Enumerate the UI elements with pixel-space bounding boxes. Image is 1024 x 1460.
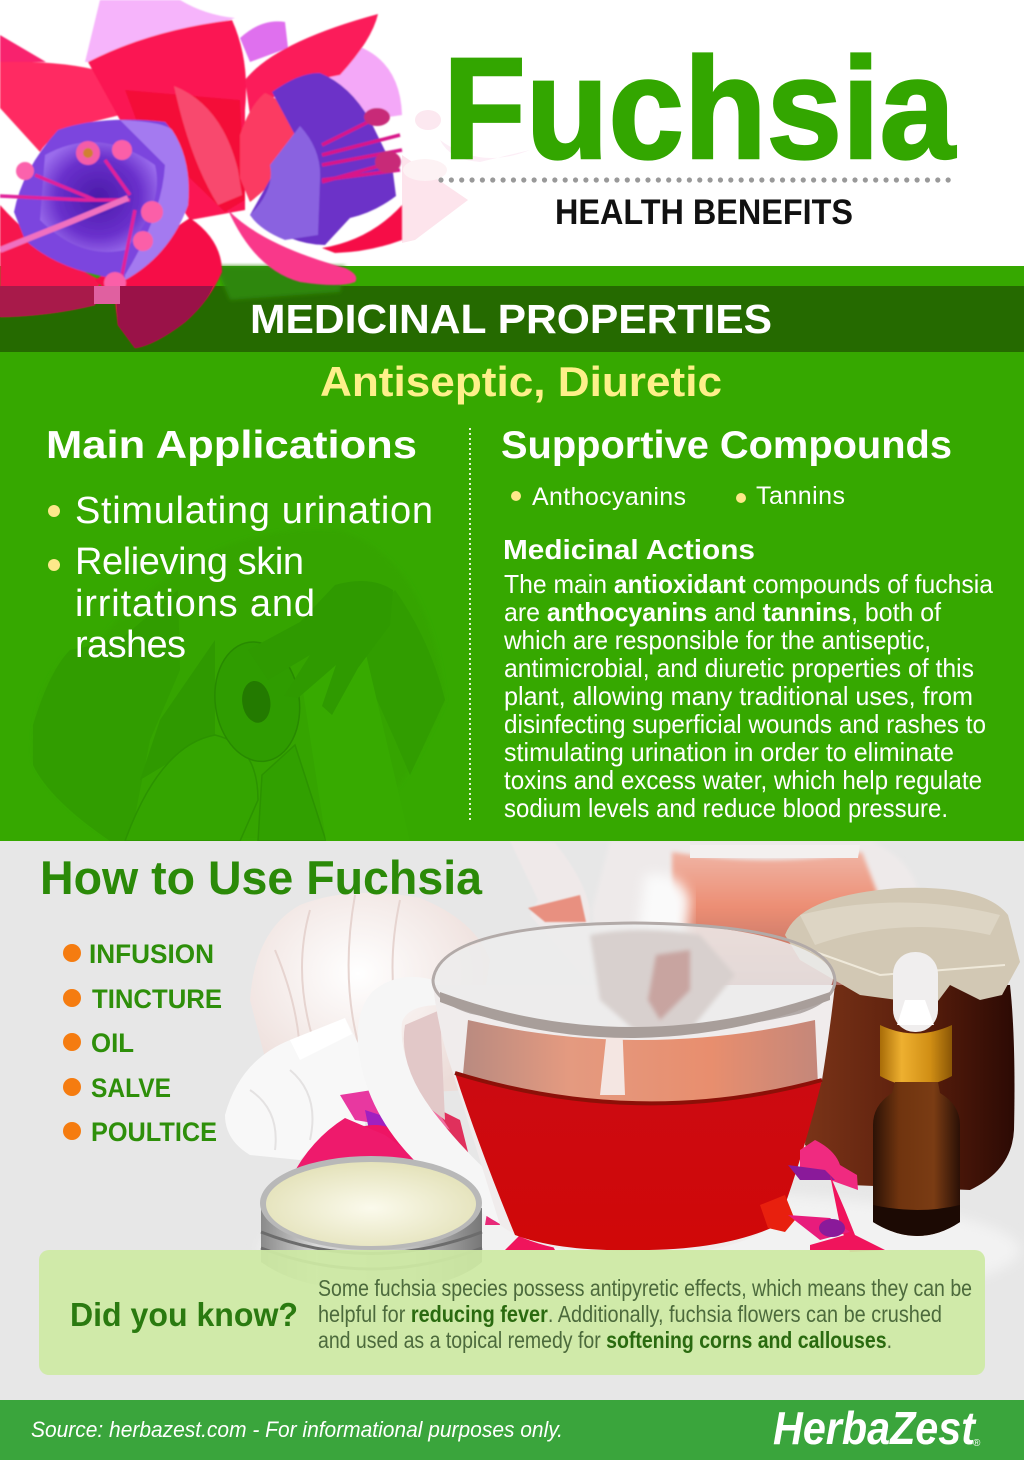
photo: woman holding toilet paper (green tint) xyxy=(33,581,445,841)
photo: poultice xyxy=(225,893,490,1160)
title: Fuchsia: Fuchsia xyxy=(443,28,956,189)
panel: main applications xyxy=(46,424,433,666)
callout text: and used as a topical remedy for softening corns and callouses. xyxy=(318,1327,892,1353)
application bullet: stimulating urination: Stimulating urination xyxy=(75,490,433,532)
use: salve: SALVE xyxy=(91,1073,171,1103)
text: medicinal actions description: toxins and excess water, which help regulate xyxy=(504,765,982,795)
text: medicinal actions description: disinfecting superficial wounds and rashes to xyxy=(504,709,986,739)
use: tincture: TINCTURE xyxy=(92,984,222,1014)
medicinal properties band xyxy=(0,286,1024,352)
text: medicinal actions description: antimicrobial, and diuretic properties of this xyxy=(504,653,974,683)
photo: fuchsia blossoms left xyxy=(290,1070,555,1250)
dotted column divider xyxy=(469,428,471,822)
properties: antiseptic, diuretic: Antiseptic, Diuretic xyxy=(320,358,722,405)
logo: HerbaZest: HerbaZest xyxy=(773,1402,977,1454)
application bullet: relieving skin: rashes xyxy=(75,624,186,666)
fuchsia flower illustration xyxy=(0,0,402,348)
text: medicinal actions description: plant, allowing many traditional uses, from xyxy=(504,681,973,711)
source text: Source: herbazest.com - For informational purposes only. xyxy=(31,1417,563,1442)
text: medicinal actions description: which are responsible for the antiseptic, xyxy=(503,625,931,655)
logo: HerbaZest: ® xyxy=(973,1438,981,1449)
subtitle: HEALTH BENEFITS xyxy=(555,193,853,232)
footer xyxy=(0,1400,1024,1460)
text: medicinal actions description: stimulating urination in order to eliminate xyxy=(504,737,954,767)
right purple bloom xyxy=(250,73,396,245)
photo: table highlight xyxy=(482,1199,1014,1270)
left bloom stamens xyxy=(0,160,135,285)
dotted divider xyxy=(441,177,950,183)
photo: salve tin xyxy=(260,1156,482,1290)
text: medicinal actions description: The main antioxidant compounds of fuchsia xyxy=(504,569,994,599)
right bloom stamens xyxy=(322,120,402,182)
heading: medicinal actions: Medicinal Actions xyxy=(503,534,755,565)
use: poultice: POULTICE xyxy=(91,1117,217,1147)
panel: supportive compounds xyxy=(501,424,994,823)
heading: how to use fuchsia: How to Use Fuchsia xyxy=(40,851,483,904)
callout heading: Did you know? xyxy=(70,1296,298,1333)
heading: supportive compounds: Supportive Compounds xyxy=(501,424,952,467)
photo: tea cup xyxy=(358,923,835,1256)
photo: jar with paper lid xyxy=(785,888,1020,1190)
background petals xyxy=(85,0,235,62)
callout: did you know xyxy=(39,1250,985,1375)
text: medicinal actions description: are anthocyanins and tannins, both of xyxy=(504,597,942,627)
heading: main applications: Main Applications xyxy=(46,424,417,467)
left purple bloom xyxy=(14,120,188,280)
list: ways to use xyxy=(63,939,222,1147)
flower shadow on green xyxy=(215,266,345,300)
photo: teapot xyxy=(528,845,879,985)
use: infusion: INFUSION xyxy=(89,939,214,969)
use: salve xyxy=(63,1073,171,1103)
use: oil xyxy=(63,1028,134,1058)
application bullet: relieving skin: irritations and xyxy=(75,583,315,625)
heading: medicinal properties: MEDICINAL PROPERTIES xyxy=(250,296,772,342)
callout text: helpful for reducing fever. Additionally, fuchsia flowers can be crushed xyxy=(318,1301,942,1327)
flower seen through band xyxy=(0,280,215,348)
text: medicinal actions description xyxy=(503,569,994,823)
callout text xyxy=(318,1275,972,1353)
application bullet: relieving skin: Relieving skin xyxy=(75,541,304,583)
panel: medicinal properties background xyxy=(0,266,1024,841)
photo: dropper bottle xyxy=(873,952,960,1236)
use: oil: OIL xyxy=(91,1028,134,1058)
text: medicinal actions description: sodium levels and reduce blood pressure. xyxy=(504,793,948,823)
compound: anthocyanins: Anthocyanins xyxy=(532,483,686,511)
compound: tannins: Tannins xyxy=(756,482,845,510)
panel: how to use background xyxy=(0,841,1024,1400)
application bullet: relieving skin xyxy=(48,541,315,666)
photo: fuchsia blossoms right xyxy=(760,1140,885,1252)
ghost fuchsia stamens behind title xyxy=(402,110,530,243)
